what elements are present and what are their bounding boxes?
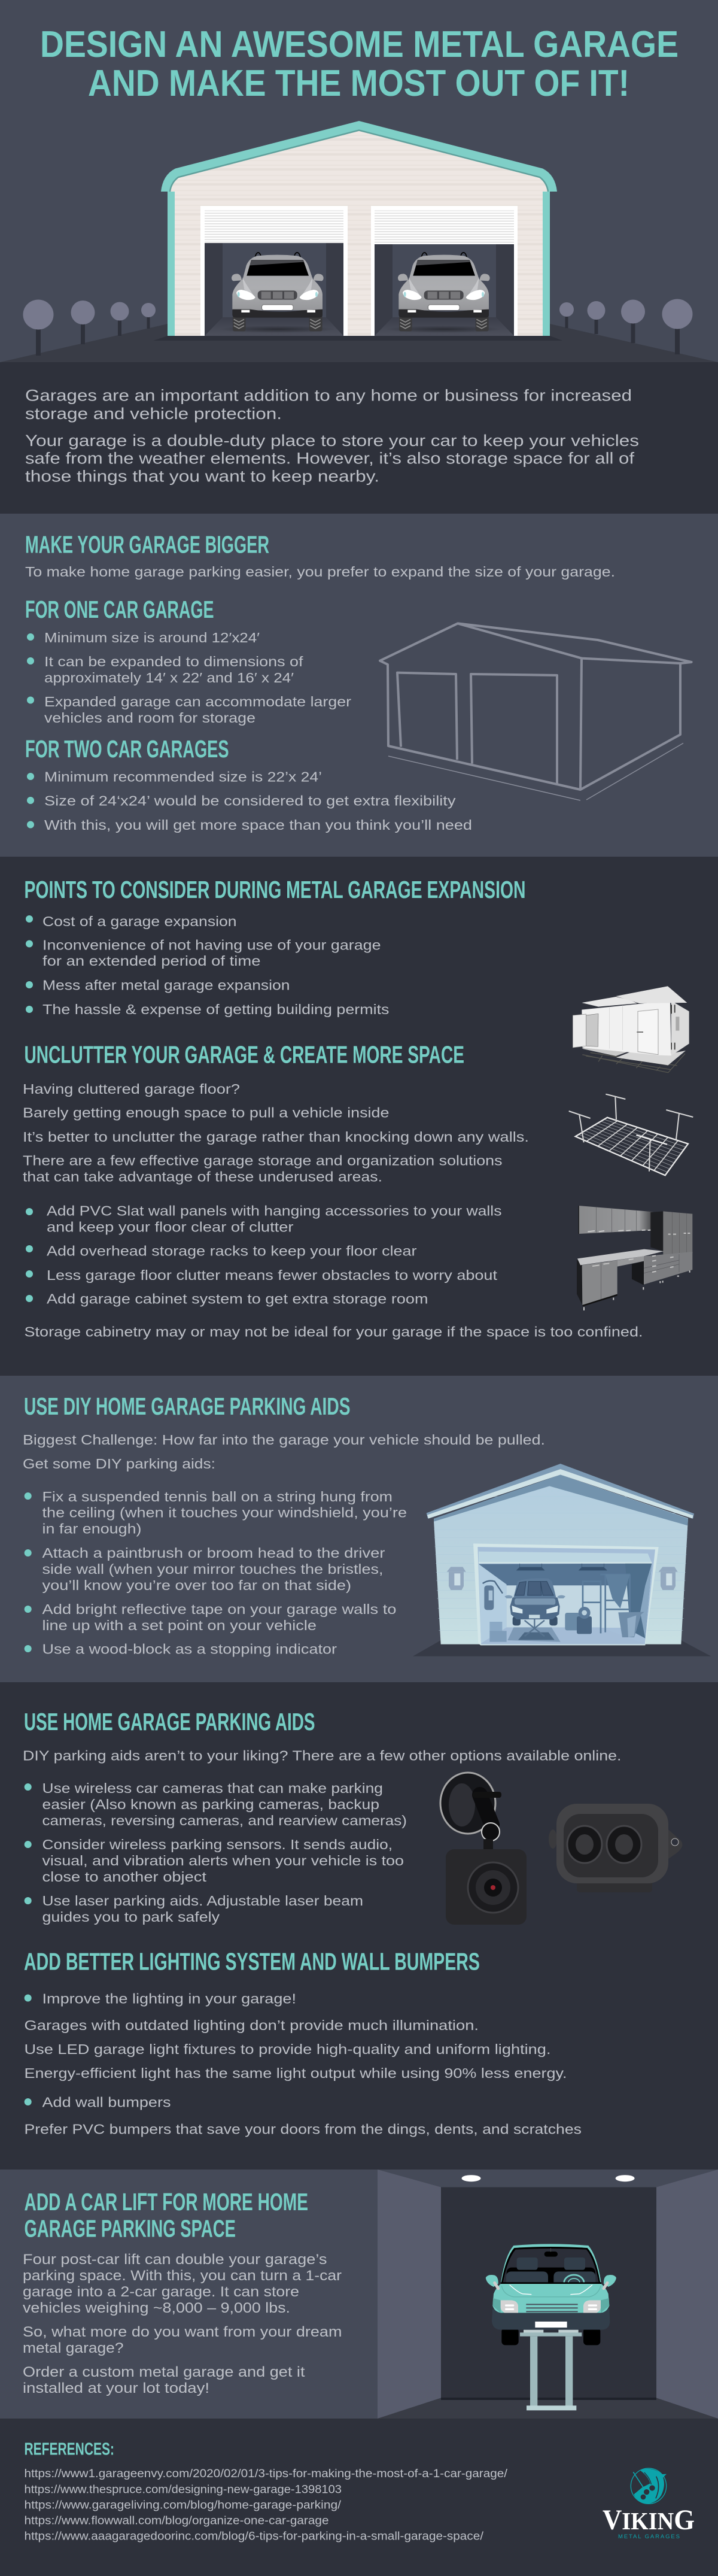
text: car lift: Order a custom metal garage and get it	[23, 2364, 305, 2380]
list: storage solutions: Less garage floor clutter means fewer obstacles to worry about	[47, 1267, 498, 1283]
list: purchased aids: easier (Also known as parking cameras, backup	[42, 1797, 379, 1812]
panel: intro	[0, 362, 718, 514]
text: lighting and bumpers: Add wall bumpers	[42, 2094, 171, 2110]
image: garage cabinets	[577, 1206, 692, 1310]
list: storage solutions: Add garage cabinet system to get extra storage room	[47, 1291, 428, 1306]
list: storage solutions	[26, 1203, 501, 1306]
panel: make your garage bigger	[0, 514, 718, 857]
list: two car garages	[27, 769, 472, 833]
reference list: https://www.flowwall.com/blog/organize-one-car-garage	[24, 2514, 329, 2528]
image: modular garage exploded	[573, 986, 689, 1073]
panel: references	[0, 2419, 718, 2576]
text: car lift: So, what more do you want from your dream	[23, 2324, 342, 2340]
heading: GARAGE PARKING SPACE	[24, 2215, 236, 2243]
right door	[371, 206, 518, 336]
list: purchased aids: close to another object	[42, 1869, 207, 1885]
list: purchased aids: Use laser parking aids. Adjustable laser beam	[42, 1893, 363, 1909]
heading	[24, 2188, 308, 2243]
intro text: storage and vehicle protection.	[25, 405, 282, 423]
text: lighting and bumpers: Garages with outdated lighting don’t provide much illumination.	[24, 2017, 479, 2033]
list: storage solutions: Add PVC Slat wall panels with hanging accessories to your walls	[47, 1203, 501, 1219]
image: overhead storage rack	[569, 1094, 693, 1175]
logo tagline: METAL GARAGES	[618, 2533, 680, 2540]
list: purchased aids: visual, and vibration alerts when your vehicle is too	[42, 1853, 404, 1868]
list: DIY aids: Attach a paintbrush or broom head to the driver	[42, 1545, 385, 1561]
reference list: https://www.thespruce.com/designing-new-garage-1398103	[24, 2483, 342, 2496]
panel: points to consider and unclutter	[0, 857, 718, 1376]
shelves	[583, 1574, 630, 1633]
list: purchased aids: cameras, reversing cameras, and rearview cameras)	[42, 1813, 407, 1828]
panel: header hero	[0, 0, 718, 362]
heading: REFERENCES:	[24, 2440, 114, 2459]
list: DIY aids: the ceiling (when it touches your windshield, you’re	[42, 1505, 407, 1521]
list: points to consider	[26, 914, 389, 1017]
extinguisher and boxes	[483, 1581, 507, 1642]
heading: UNCLUTTER YOUR GARAGE & CREATE MORE SPACE	[24, 1040, 464, 1068]
list: DIY aids: line up with a set point on your vehicle	[42, 1618, 317, 1633]
heading: ADD BETTER LIGHTING SYSTEM AND WALL BUMPERS	[24, 1948, 480, 1976]
list: storage solutions: Add overhead storage racks to keep your floor clear	[47, 1243, 417, 1258]
closing note: Storage cabinetry may or may not be ideal for your garage if the space is too confined.	[24, 1324, 643, 1340]
text: lighting and bumpers: Prefer PVC bumpers that save your doors from the dings, dents, and scratches	[24, 2122, 582, 2137]
image: parking sensor	[549, 1804, 682, 1892]
text: unclutter intro: Having cluttered garage floor?	[23, 1081, 240, 1097]
icon: garage outline	[380, 623, 692, 800]
list: points to consider: Cost of a garage expansion	[42, 914, 237, 929]
text: unclutter intro: that can take advantage of these underused areas.	[23, 1169, 382, 1184]
garage illustration	[153, 121, 562, 341]
text: unclutter intro	[23, 1081, 529, 1184]
illustration: open garage interior	[413, 1464, 711, 1656]
reference list: https://www.garageliving.com/blog/home-garage-parking/	[24, 2499, 342, 2512]
list: purchased aids: Use wireless car cameras that can make parking	[42, 1780, 383, 1796]
subheading: one car: FOR ONE CAR GARAGE	[25, 596, 214, 623]
trees left	[23, 299, 156, 356]
reference list: https://www1.garageenvy.com/2020/02/01/3-tips-for-making-the-most-of-a-1-car-garage/	[24, 2468, 508, 2480]
intro text	[25, 387, 639, 485]
list: one car garage	[27, 630, 351, 726]
ground road	[0, 324, 718, 362]
text: lighting and bumpers: Energy-efficient light has the same light output while using 90% less energy.	[24, 2065, 567, 2081]
left door	[200, 206, 348, 336]
list: points to consider: for an extended period of time	[42, 953, 261, 969]
intro text: safe from the weather elements. However, it’s also storage space for all of	[25, 449, 635, 467]
title	[40, 24, 679, 104]
heading: USE HOME GARAGE PARKING AIDS	[24, 1708, 315, 1735]
text: lighting and bumpers	[24, 1991, 582, 2137]
list: points to consider: Mess after metal garage expansion	[42, 977, 290, 993]
tyres, can and bin	[565, 1607, 644, 1637]
text: unclutter intro: There are a few effective garage storage and organization solutions	[23, 1153, 503, 1169]
panel: car lift	[0, 2170, 718, 2419]
list: purchased aids: guides you to park safely	[42, 1909, 220, 1925]
list: DIY aids: Fix a suspended tennis ball on a string hung from	[42, 1489, 393, 1504]
list: DIY aids: you’ll know you’re over too far on that side)	[42, 1577, 351, 1593]
text: car lift: installed at your lot today!	[23, 2380, 209, 2396]
list: purchased aids	[25, 1780, 407, 1925]
list: DIY aids: Add bright reflective tape on your garage walls to	[42, 1601, 396, 1617]
text: challenge	[23, 1432, 545, 1471]
list: one car garage: It can be expanded to dimensions of	[44, 654, 303, 669]
list: one car garage: approximately 14′ x 22′ and 16′ x 24′	[44, 670, 294, 685]
list: DIY aids: in far enough)	[42, 1521, 141, 1536]
intro text: Your garage is a double-duty place to store your car to keep your vehicles	[25, 432, 639, 450]
list: one car garage: Expanded garage can accommodate larger	[44, 694, 351, 709]
heading: ADD A CAR LIFT FOR MORE HOME	[24, 2188, 308, 2216]
lead text: To make home garage parking easier, you prefer to expand the size of your garage.	[25, 564, 615, 579]
reference list	[24, 2468, 508, 2543]
text: car lift: parking space. With this, you can turn a 1-car	[23, 2268, 342, 2284]
text: car lift: garage into a 2-car garage. It can store	[23, 2284, 299, 2300]
list: two car garages: Size of 24‘x24’ would be considered to get extra flexibility	[44, 793, 456, 808]
trees right	[559, 299, 693, 354]
list: DIY aids: Use a wood-block as a stopping indicator	[42, 1642, 337, 1657]
illustration: garage room with lift	[378, 2170, 718, 2419]
car on lift	[486, 2244, 616, 2410]
list: DIY aids: side wall (when your mirror touches the bristles,	[42, 1561, 383, 1577]
intro text: Garages are an important addition to any home or business for increased	[25, 387, 632, 405]
text: car lift: metal garage?	[23, 2340, 124, 2356]
panel: home garage parking aids and lighting	[0, 1682, 718, 2170]
text: unclutter intro: Barely getting enough space to pull a vehicle inside	[23, 1105, 389, 1121]
logo wordmark: VIKING	[603, 2504, 695, 2536]
car left	[220, 253, 335, 333]
text: car lift: vehicles weighing ~8,000 – 9,000 lbs.	[23, 2300, 290, 2316]
text: challenge: Biggest Challenge: How far into the garage your vehicle should be pulled.	[23, 1432, 545, 1448]
subheading: two cars: FOR TWO CAR GARAGES	[25, 735, 229, 763]
title: AND MAKE THE MOST OUT OF IT!	[88, 63, 629, 104]
list: two car garages: With this, you will get more space than you think you’ll need	[44, 817, 472, 833]
car right	[386, 253, 501, 333]
text: car lift	[23, 2252, 342, 2396]
panel: DIY parking aids	[0, 1376, 718, 1682]
logo: Viking Metal Garages	[603, 2468, 695, 2540]
text: unclutter intro: It’s better to unclutter the garage rather than knocking down any walls.	[23, 1129, 529, 1145]
list: storage solutions: and keep your floor clear of clutter	[47, 1219, 294, 1234]
image: dash camera	[440, 1773, 527, 1925]
heading: USE DIY HOME GARAGE PARKING AIDS	[24, 1392, 351, 1420]
intro text: those things that you want to keep nearby.	[25, 467, 379, 485]
list: purchased aids: Consider wireless parking sensors. It sends audio,	[42, 1837, 393, 1852]
list: one car garage: Minimum size is around 12′x24′	[44, 630, 260, 645]
ceiling lamps	[516, 1564, 607, 1570]
logo emblem	[631, 2468, 667, 2504]
reference list: https://www.aaagaragedoorinc.com/blog/6-tips-for-parking-in-a-small-garage-space/	[24, 2530, 484, 2543]
text: lighting and bumpers: Use LED garage light fixtures to provide high-quality and uniform lighting.	[24, 2041, 550, 2057]
raised car	[504, 1578, 565, 1636]
text: car lift: Four post-car lift can double your garage’s	[23, 2252, 327, 2268]
list: two car garages: Minimum recommended size is 22’x 24’	[44, 769, 322, 784]
list: points to consider: Inconvenience of not having use of your garage	[42, 937, 381, 953]
heading: MAKE YOUR GARAGE BIGGER	[25, 530, 269, 558]
list: one car garage: vehicles and room for storage	[44, 710, 255, 726]
list: DIY aids	[25, 1489, 407, 1657]
list: points to consider: The hassle & expense of getting building permits	[42, 1002, 389, 1017]
wall lanterns	[447, 1567, 678, 1590]
lead text: DIY parking aids aren’t to your liking? There are a few other options available online.	[23, 1748, 621, 1764]
text: lighting and bumpers: Improve the lighting in your garage!	[42, 1991, 296, 2007]
text: challenge: Get some DIY parking aids:	[23, 1456, 215, 1471]
